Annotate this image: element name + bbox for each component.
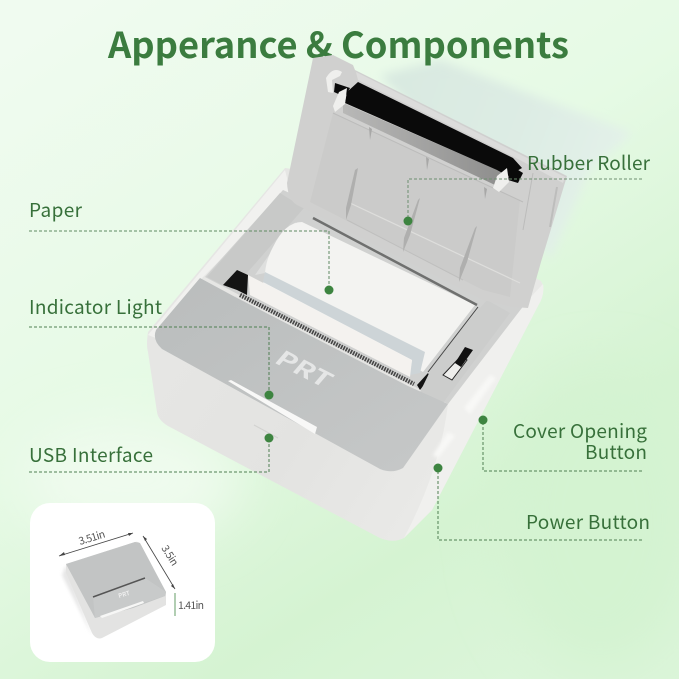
label: USB Interface: USB Interface	[29, 441, 153, 468]
label: USB Interface	[29, 434, 274, 472]
dimension: width	[59, 527, 133, 556]
side cover button	[464, 375, 496, 414]
roller end caps	[326, 70, 342, 93]
black roller	[345, 82, 522, 176]
paper roll	[263, 222, 475, 372]
title: Apperance & Components	[107, 17, 569, 69]
label: Cover Opening Button	[478, 416, 647, 471]
side power button	[433, 432, 455, 458]
rim highlight along lid top	[356, 72, 565, 183]
printer body	[147, 168, 543, 541]
printer illustration	[147, 55, 567, 541]
label: Power Button: Power Button	[526, 508, 650, 535]
dimension: height	[175, 593, 204, 616]
front paper sheet	[248, 275, 412, 377]
grey top plate	[155, 278, 448, 471]
panel: dimensions inset	[30, 503, 215, 662]
grey strip below roller	[343, 103, 502, 185]
dimension: width: 3.51in	[77, 527, 107, 549]
dimension: height: 1.41in	[178, 598, 204, 613]
label: Paper	[29, 196, 334, 294]
mini printer	[62, 542, 166, 638]
label: Cover Opening Button: Cover Opening	[513, 417, 647, 444]
dimension: depth	[143, 536, 182, 589]
label: Power Button	[434, 464, 650, 540]
black cutter end	[223, 270, 248, 295]
label: Rubber Roller: Rubber Roller	[527, 149, 651, 176]
right latch block	[420, 300, 510, 407]
gap between lid and paper	[313, 218, 477, 305]
label: Rubber Roller	[404, 149, 651, 226]
dimension: depth: 3.5in	[158, 542, 182, 569]
label: Cover Opening Button: Button	[585, 438, 647, 465]
blue paper band	[263, 272, 425, 375]
label: Indicator Light	[29, 293, 274, 400]
label: Indicator Light: Indicator Light	[29, 293, 162, 320]
USB port	[254, 425, 278, 438]
interior well	[205, 190, 528, 404]
body top rim highlight	[148, 170, 290, 338]
mini printer: PRT	[117, 588, 131, 600]
serrated cutter	[240, 295, 414, 384]
open lid	[287, 55, 567, 308]
PRT logo: PRT	[268, 343, 341, 394]
roller axles	[334, 83, 350, 97]
front clip	[228, 380, 317, 434]
label: Paper: Paper	[29, 196, 83, 223]
